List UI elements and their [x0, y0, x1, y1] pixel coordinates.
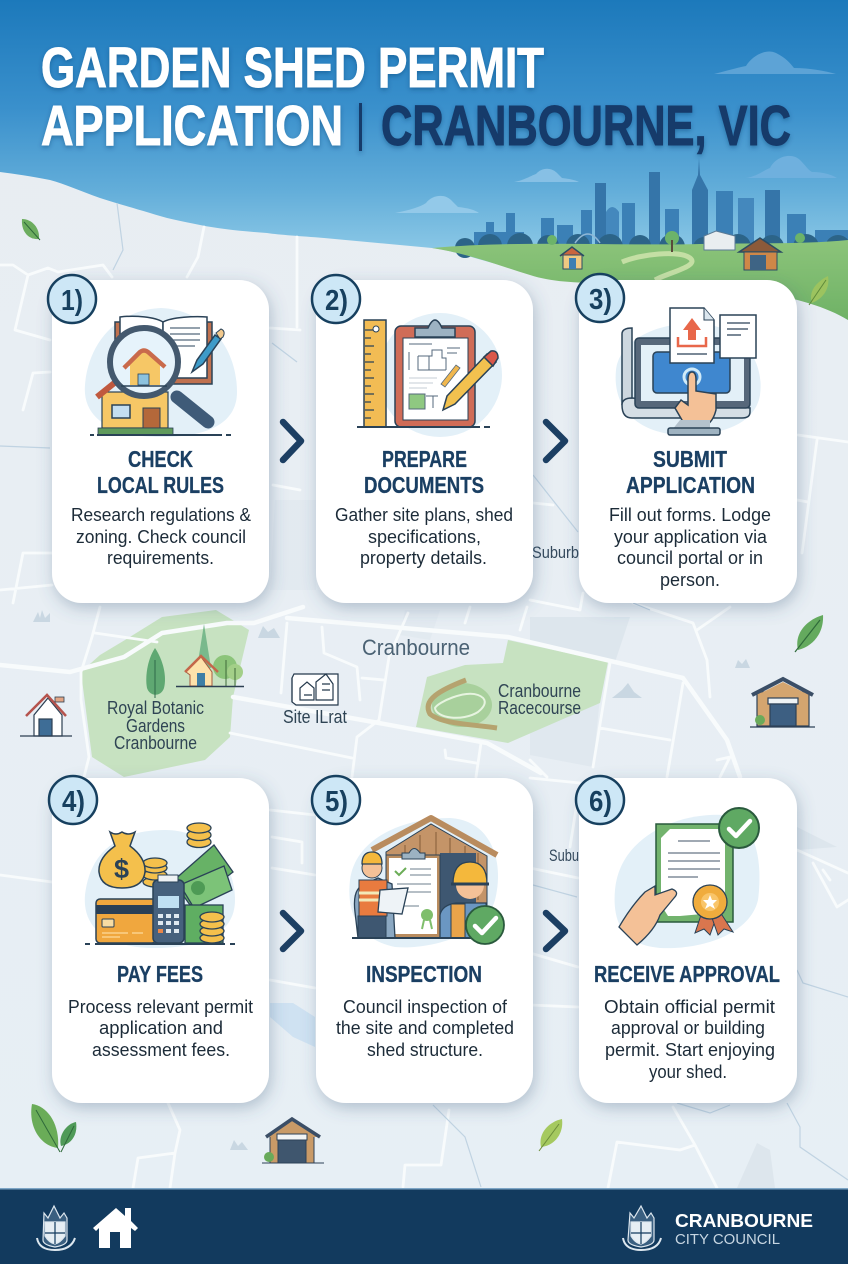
- badge 3: [576, 274, 624, 322]
- body text: [335, 504, 513, 568]
- body text: person.: [660, 569, 720, 590]
- panel: step 5: [312, 776, 533, 1103]
- body text: [609, 504, 771, 590]
- crest: footer right: [623, 1206, 661, 1250]
- body text: your shed.: [649, 1061, 727, 1082]
- leaf: top right: [809, 276, 828, 305]
- footer: [0, 1188, 848, 1264]
- badge 2: 2): [325, 285, 348, 317]
- heading: DOCUMENTS: [364, 472, 484, 498]
- body text: Gather site plans, shed: [335, 504, 513, 525]
- arrow: step 5 to 6: [546, 913, 565, 949]
- sky header: [0, 0, 848, 320]
- badge 1: 1): [61, 285, 83, 317]
- hill path and houses: [547, 231, 805, 280]
- body text: council portal or in: [617, 547, 763, 568]
- crest: footer left: [37, 1206, 75, 1250]
- skyline: [474, 158, 848, 250]
- title line 1: GARDEN SHED PERMIT: [41, 36, 544, 100]
- heading: PAY FEES: [117, 961, 203, 987]
- card 6: [579, 778, 797, 1103]
- leaf: mid right: [795, 615, 823, 652]
- leaf: top left: [22, 219, 40, 240]
- body text: Council inspection of: [343, 996, 508, 1017]
- panel: step 3: [576, 274, 797, 603]
- heading: [626, 446, 755, 498]
- icon: shed right: [750, 679, 815, 727]
- heading: [97, 446, 224, 498]
- footer council name: [675, 1211, 813, 1248]
- body text: property details.: [360, 547, 487, 568]
- body text: Obtain official permit: [604, 996, 775, 1017]
- body text: shed structure.: [367, 1039, 483, 1060]
- heading: INSPECTION: [366, 961, 482, 987]
- icon: shed bottom: [262, 1119, 324, 1163]
- icon: receive approval: [615, 808, 759, 948]
- road network: [0, 227, 848, 1188]
- body text: [336, 996, 514, 1060]
- arrow: step 1 to 2: [283, 422, 301, 460]
- body text: Process relevant permit: [68, 996, 253, 1017]
- label: Royal Botanic Gardens Cranbourne: [107, 698, 204, 753]
- card 3: [579, 280, 797, 603]
- label: Suburb top: Suburb: [532, 544, 579, 562]
- body text: application and: [99, 1017, 223, 1038]
- clouds: [395, 51, 837, 213]
- badge 6: [576, 776, 624, 824]
- park: Royal Botanic Gardens: [81, 610, 249, 777]
- heading: PREPARE: [382, 446, 467, 472]
- river lines: [0, 203, 848, 1187]
- panel: step 1: [48, 275, 269, 603]
- panel: step 6: [576, 776, 797, 1103]
- footer council name: CRANBOURNE: [675, 1211, 813, 1231]
- badge 5: 5): [325, 786, 348, 818]
- body text: zoning. Check council: [76, 526, 246, 547]
- title separator: [359, 103, 362, 151]
- tree line: [455, 233, 848, 261]
- body text: assessment fees.: [92, 1039, 230, 1060]
- badge 6: 6): [589, 786, 612, 818]
- green hill: [432, 240, 848, 320]
- body text: [68, 996, 253, 1060]
- body text: Fill out forms. Lodge: [609, 504, 771, 525]
- leaves: bottom left: [31, 1104, 76, 1152]
- arrow: step 4 to 5: [283, 913, 301, 949]
- badge 2: [312, 275, 360, 323]
- map area shading: [270, 500, 837, 1188]
- footer council name: CITY COUNCIL: [675, 1231, 780, 1248]
- icon: racecourse track: [428, 680, 497, 728]
- icon: small house left: [20, 695, 72, 736]
- label: Cranbourne Racecourse: Cranbourne: [498, 681, 581, 701]
- card 1: [52, 280, 269, 603]
- body text: permit. Start enjoying: [605, 1039, 775, 1060]
- badge 4: [49, 776, 97, 824]
- heading: [364, 446, 484, 498]
- heading: CHECK: [128, 446, 193, 472]
- heading: SUBMIT: [653, 446, 727, 472]
- lake: [270, 1003, 315, 1047]
- leaf: bottom centre: [539, 1119, 562, 1151]
- label: Royal Botanic Gardens Cranbourne: Royal Botanic: [107, 698, 204, 718]
- icon: site plan: [292, 674, 338, 705]
- body text: requirements.: [107, 547, 214, 568]
- park: Cranbourne Racecourse: [416, 640, 608, 743]
- panel: step 2: [312, 275, 533, 603]
- label: Cranbourne: Cranbourne: [362, 635, 470, 660]
- arrow: step 2 to 3: [546, 422, 565, 460]
- icon: footer home: [93, 1208, 138, 1248]
- heading: LOCAL RULES: [97, 472, 224, 498]
- icon: botanic garden house and trees: [146, 624, 244, 698]
- badge 3: 3): [589, 284, 612, 316]
- label: Suburb lower: Subu: [549, 847, 579, 865]
- icon: pay fees: [85, 823, 235, 948]
- icon: pay fees: $: [114, 854, 129, 884]
- icon: inspection: [349, 818, 504, 947]
- body text: the site and completed: [336, 1017, 514, 1038]
- label: Royal Botanic Gardens Cranbourne: Gardens: [126, 716, 185, 736]
- icon: prepare documents: [357, 313, 502, 437]
- body text: [71, 504, 252, 568]
- body text: approval or building: [611, 1017, 765, 1038]
- icon: check local rules: [85, 308, 237, 437]
- heading: RECEIVE APPROVAL: [594, 961, 780, 987]
- body text: Research regulations &: [71, 504, 252, 525]
- label: Cranbourne Racecourse: [498, 681, 581, 718]
- title: [41, 36, 791, 158]
- label: Site ILrat: Site ILrat: [283, 707, 347, 727]
- heading: APPLICATION: [626, 472, 755, 498]
- card 5: [316, 778, 533, 1103]
- card 4: [52, 778, 269, 1103]
- grass tufts: [33, 610, 750, 1150]
- label: Royal Botanic Gardens Cranbourne: Cranbourne: [114, 733, 197, 753]
- badge 5: [312, 776, 360, 824]
- label: Cranbourne Racecourse: Racecourse: [498, 698, 581, 718]
- icon: submit application: [616, 308, 761, 435]
- body text: specifications,: [368, 526, 481, 547]
- body text: your application via: [614, 526, 768, 547]
- title line 2: APPLICATION: [41, 94, 343, 158]
- body text: [604, 996, 775, 1082]
- panel: step 4: [49, 776, 269, 1103]
- badge 1: [48, 275, 96, 323]
- badge 4: 4): [62, 786, 85, 818]
- card 2: [316, 280, 533, 603]
